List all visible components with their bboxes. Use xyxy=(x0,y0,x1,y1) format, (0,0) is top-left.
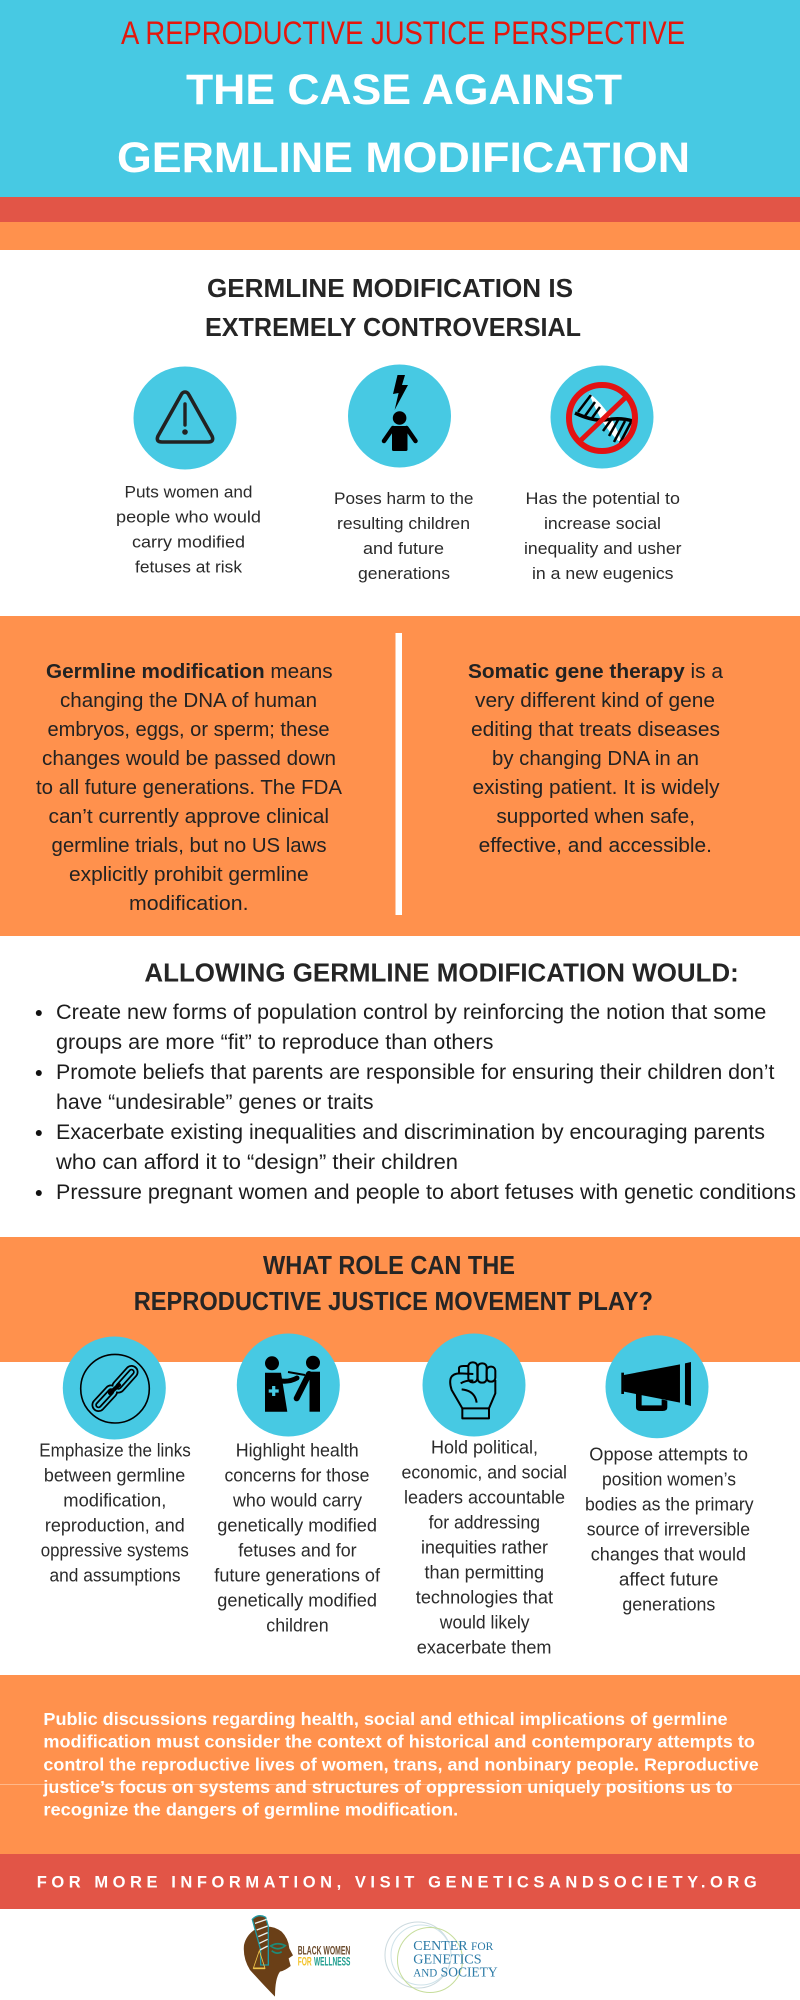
text: somatic definition: supported when safe, xyxy=(496,806,695,828)
text: oppose attempts: Oppose attempts to xyxy=(589,1444,748,1465)
text: public discussions: modification must consider the context of historical and contemporary attempts to xyxy=(43,1732,755,1752)
panel: allowing germline modification xyxy=(36,958,796,1204)
text: public discussions: justice’s focus on systems and structures of oppression uniquely positions us to xyxy=(42,1777,733,1797)
text: public discussions: recognize the dangers of germline modification. xyxy=(43,1800,458,1820)
text: highlight health concerns: genetically modified xyxy=(217,1515,377,1536)
text: harm to children: resulting children xyxy=(337,514,470,533)
text: somatic definition: by changing DNA in an xyxy=(492,748,699,770)
text: hold leaders accountable: exacerbate them xyxy=(417,1637,552,1658)
text: oppose attempts: changes that would xyxy=(591,1544,746,1565)
icon: medical injection xyxy=(237,1334,340,1436)
bullet list: groups are more “fit” to reproduce than others xyxy=(56,1031,493,1054)
text: oppose attempts: source of irreversible xyxy=(587,1519,750,1540)
text: social inequality: inequality and usher xyxy=(524,539,682,558)
panel: definitions xyxy=(0,616,800,936)
bullet list: Exacerbate existing inequalities and discrimination by encouraging parents xyxy=(56,1121,765,1144)
text: germline definition: embryos, eggs, or sperm; these xyxy=(48,719,330,741)
text: hold leaders accountable: economic, and social xyxy=(402,1462,567,1483)
text: public discussions xyxy=(42,1709,759,1820)
header banner xyxy=(0,0,800,250)
text: somatic definition: existing patient. It is widely xyxy=(472,777,720,799)
icon: raised fist xyxy=(422,1334,526,1436)
text: emphasize links: oppressive systems xyxy=(41,1540,189,1561)
logo: Black Women for Wellness xyxy=(244,1916,350,1997)
text: germline definition: changes would be passed down xyxy=(42,748,336,770)
text: risk to women: fetuses at risk xyxy=(135,558,243,576)
text: germline definition: changing the DNA of human xyxy=(60,690,317,712)
text: oppose attempts: generations xyxy=(622,1594,715,1615)
text: germline definition: Germline modification means xyxy=(46,661,333,683)
text: germline definition: explicitly prohibit germline xyxy=(69,864,309,886)
panel: controversial xyxy=(116,273,682,583)
bullet list: Pressure pregnant women and people to abort fetuses with genetic conditions xyxy=(56,1181,796,1204)
text: germline definition: to all future generations. The FDA xyxy=(36,777,343,799)
heading: role xyxy=(134,1250,653,1316)
text: hold leaders accountable: Hold political, xyxy=(431,1437,538,1458)
text: social inequality xyxy=(524,489,682,583)
text: emphasize links xyxy=(39,1440,191,1586)
text: harm to children xyxy=(334,489,474,583)
text: harm to children: generations xyxy=(358,564,450,583)
text: germline definition: modification. xyxy=(129,893,248,915)
text: highlight health concerns: who would carry xyxy=(232,1490,363,1511)
title xyxy=(117,66,690,182)
text: highlight health concerns: Highlight health xyxy=(236,1440,359,1461)
title: GERMLINE MODIFICATION xyxy=(117,134,690,182)
text: highlight health concerns: fetuses and for xyxy=(238,1540,357,1561)
bullet list: Promote beliefs that parents are responsible for ensuring their children don’t xyxy=(56,1061,775,1084)
logo: Black Women for Wellness: BLACK WOMEN xyxy=(298,1946,350,1958)
panel: role of the movement xyxy=(0,1237,800,1658)
heading: controversial: GERMLINE MODIFICATION IS xyxy=(207,273,573,303)
text: harm to children: Poses harm to the xyxy=(334,489,474,508)
text: somatic definition xyxy=(468,661,724,857)
text: hold leaders accountable: inequities rather xyxy=(421,1537,548,1558)
heading: role: REPRODUCTIVE JUSTICE MOVEMENT PLAY? xyxy=(134,1286,653,1316)
text: highlight health concerns: children xyxy=(266,1615,329,1636)
text: public discussions: Public discussions regarding health, social and ethical implications of germline xyxy=(43,1709,728,1729)
text: public discussions: control the reproductive lives of women, trans, and nonbinary people. Reproductive xyxy=(43,1754,759,1774)
logo: Center for Genetics and Society: AND SOCIETY xyxy=(413,1966,498,1981)
text: risk to women: Puts women and xyxy=(124,482,252,502)
text: hold leaders accountable: leaders accountable xyxy=(404,1487,565,1508)
logo: Center for Genetics and Society xyxy=(385,1922,498,1992)
text: oppose attempts xyxy=(585,1444,754,1615)
text: emphasize links: reproduction, and xyxy=(45,1515,185,1536)
text: emphasize links: modification, xyxy=(63,1490,166,1511)
text: risk to women: people who would xyxy=(116,508,261,526)
text: social inequality: in a new eugenics xyxy=(532,564,674,583)
text: emphasize links: Emphasize the links xyxy=(39,1440,191,1461)
text: hold leaders accountable: than permitting xyxy=(424,1562,544,1583)
text: somatic definition: effective, and accessible. xyxy=(479,835,712,857)
heading: controversial xyxy=(205,273,581,342)
logo: Center for Genetics and Society: CENTER FOR xyxy=(413,1939,494,1954)
text: hold leaders accountable: would likely xyxy=(439,1612,530,1633)
text: hold leaders accountable: technologies that xyxy=(416,1587,553,1608)
text: germline definition: can’t currently approve clinical xyxy=(48,806,329,828)
text: oppose attempts: position women’s xyxy=(602,1469,736,1490)
text: social inequality: increase social xyxy=(544,514,661,533)
heading: role: WHAT ROLE CAN THE xyxy=(263,1250,515,1280)
call to action bar xyxy=(0,1854,800,1909)
text: somatic definition: Somatic gene therapy is a xyxy=(468,661,724,683)
text: risk to women xyxy=(116,482,261,576)
heading: controversial: EXTREMELY CONTROVERSIAL xyxy=(205,312,581,342)
text: risk to women: carry modified xyxy=(132,532,245,552)
text: germline definition xyxy=(36,661,343,915)
icon: chain link xyxy=(63,1336,166,1440)
text: germline definition: germline trials, but no US laws xyxy=(52,835,326,857)
icon: lightning over child xyxy=(348,364,451,468)
text: emphasize links: between germline xyxy=(44,1465,185,1486)
text: oppose attempts: bodies as the primary xyxy=(585,1494,754,1515)
text: somatic definition: editing that treats diseases xyxy=(471,719,720,741)
call to action bar: FOR MORE INFORMATION, VISIT GENETICSANDSOCIETY.ORG xyxy=(37,1874,757,1892)
text: highlight health concerns xyxy=(214,1440,381,1636)
text: emphasize links: and assumptions xyxy=(50,1565,181,1586)
icon: warning triangle xyxy=(134,366,236,470)
text: social inequality: Has the potential to xyxy=(526,489,680,508)
subtitle: A REPRODUCTIVE JUSTICE PERSPECTIVE xyxy=(121,15,685,51)
text: oppose attempts: affect future xyxy=(619,1569,718,1590)
text: highlight health concerns: genetically modified xyxy=(217,1590,377,1611)
title: THE CASE AGAINST xyxy=(186,66,622,114)
bullet list: Create new forms of population control by reinforcing the notion that some xyxy=(56,1001,766,1024)
text: highlight health concerns: future generations of xyxy=(214,1565,381,1586)
icon: crossed-out DNA xyxy=(550,366,654,468)
text: harm to children: and future xyxy=(363,539,444,558)
bullet list: have “undesirable” genes or traits xyxy=(56,1091,374,1114)
logo: Center for Genetics and Society: GENETICS xyxy=(413,1952,482,1967)
text: somatic definition: very different kind of gene xyxy=(475,690,715,712)
bullet list xyxy=(36,1001,796,1204)
bullet list: who can afford it to “design” their children xyxy=(55,1151,458,1174)
logo: Black Women for Wellness: WELLNESS xyxy=(314,1957,350,1969)
text: hold leaders accountable: for addressing xyxy=(429,1512,540,1533)
panel: closing statement xyxy=(0,1675,800,1855)
text: highlight health concerns: concerns for those xyxy=(224,1465,369,1486)
text: hold leaders accountable xyxy=(402,1437,567,1658)
icon: megaphone xyxy=(606,1335,708,1438)
heading: allowing: ALLOWING GERMLINE MODIFICATION WOULD: xyxy=(144,958,739,988)
logo: Black Women for Wellness: FOR xyxy=(298,1957,312,1969)
